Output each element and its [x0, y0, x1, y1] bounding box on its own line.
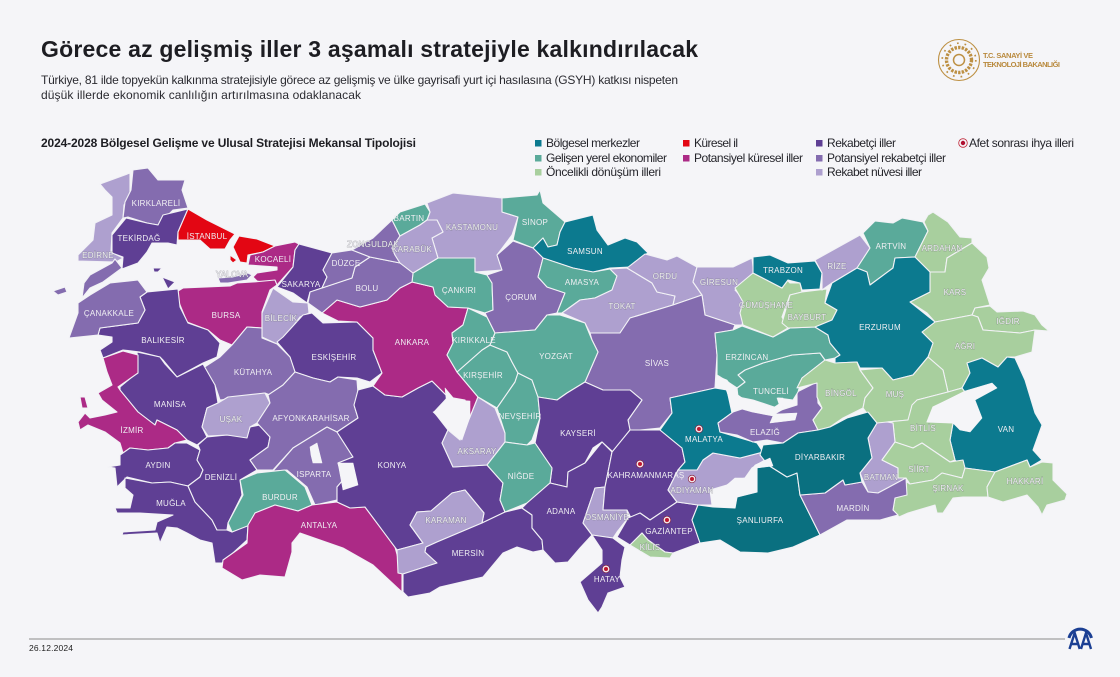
province: Ağrı [922, 315, 1035, 392]
province labels on light fills: KARABÜK [392, 245, 432, 254]
province labels on light fills: BİTLİS [910, 424, 936, 433]
province labels on light fills: AKSARAY [458, 447, 497, 456]
province labels on light fills: UŞAK [220, 415, 243, 424]
province: Malatya [660, 388, 763, 470]
province: Kayseri [535, 382, 642, 487]
province: Denizli [188, 425, 270, 530]
province: Yalova [218, 273, 252, 283]
province: Bolu [308, 257, 413, 313]
province: Gaziantep [617, 502, 700, 553]
province: Aksaray [442, 397, 505, 467]
province: Van [950, 357, 1042, 472]
province: Bilecik [262, 288, 309, 344]
province labels on dark fills: ÇANKIRI [442, 286, 476, 295]
province: Tokat [562, 268, 675, 333]
province: Hakkari [987, 460, 1067, 515]
province: İstanbul island [230, 255, 237, 263]
province: Edirne [78, 173, 130, 262]
province: Mersin [403, 508, 543, 597]
province: Karaman [397, 490, 484, 574]
province: Elazığ [718, 382, 822, 443]
province: Bursa [178, 280, 277, 345]
province labels on light fills: KARS [944, 288, 966, 297]
province labels on dark fills: ERZİNCAN [726, 353, 768, 362]
province labels on light fills [82, 223, 1043, 552]
province labels on light fills: BAYBURT [788, 313, 826, 322]
subtitle: Türkiye, 81 ilde topyekün kalkınma stratejisiyle görece az gelişmiş ve ülke gayrisafi yurt içi hasılasına (GSYH) katkısı nispeten [41, 73, 678, 87]
province labels on dark fills: KAHRAMANMARAŞ [607, 471, 685, 480]
province labels on light fills: EDİRNE [82, 251, 114, 260]
province: Batman [860, 422, 906, 493]
province labels on dark fills: BOLU [356, 284, 378, 293]
legend: Rekabetçi iller [827, 136, 896, 150]
province: Kocaeli [248, 242, 299, 285]
province labels on light fills: KASTAMONU [446, 223, 498, 232]
province labels on dark fills: KONYA [378, 461, 407, 470]
province labels on dark fills: ÇORUM [505, 293, 537, 302]
province labels on dark fills: HATAY [594, 575, 620, 584]
province labels on dark fills: TEKİRDAĞ [118, 234, 160, 243]
province labels on light fills: KİLİS [640, 543, 660, 552]
province: Bayburt [782, 289, 837, 328]
province labels on dark fills: ESKİŞEHİR [312, 353, 356, 362]
province labels on dark fills: ANTALYA [301, 521, 338, 530]
province labels on light fills: IĞDIR [996, 317, 1020, 326]
disaster markers [602, 425, 703, 573]
province labels on dark fills: İZMİR [120, 426, 144, 435]
province labels on dark fills: BURSA [212, 311, 241, 320]
province labels on light fills: OSMANİYE [585, 513, 629, 522]
province labels on dark fills: DİYARBAKIR [795, 453, 845, 462]
province: Kastamonu [427, 193, 518, 272]
province labels on dark fills: İSTANBUL [187, 232, 228, 241]
province labels on light fills: ORDU [653, 272, 677, 281]
province labels on dark fills: SİNOP [522, 218, 548, 227]
province labels on dark fills: MANİSA [154, 400, 186, 409]
province: Kütahya [203, 327, 295, 400]
subtitle: düşük illerde ekonomik canlılığın artırılmasına odaklanacak [41, 88, 362, 102]
province labels on light fills: ŞIRNAK [932, 484, 964, 493]
province labels on dark fills: DENİZLİ [205, 473, 237, 482]
legend: Potansiyel küresel iller [694, 151, 803, 165]
legend: Gelişen yerel ekonomiler [546, 151, 667, 165]
legend: Öncelikli dönüşüm illeri [546, 165, 661, 179]
province: Sivas [585, 295, 735, 431]
title: Görece az gelişmiş iller 3 aşamalı stratejiyle kalkındırılacak [41, 36, 698, 62]
province labels on light fills: RİZE [827, 262, 847, 271]
province: Ardahan [915, 212, 972, 272]
province: Artvin [857, 218, 928, 285]
province: Adana [522, 442, 612, 563]
province: Iğdır [972, 306, 1049, 333]
province labels on dark fills: KÜTAHYA [234, 368, 273, 377]
province labels on dark fills: VAN [998, 425, 1014, 434]
province: Burdur [228, 470, 312, 532]
province: Çorum [485, 241, 565, 333]
lakes [310, 378, 997, 508]
province labels on dark fills: MERSİN [452, 549, 484, 558]
province labels on dark fills: KAYSERİ [560, 429, 596, 438]
province labels on light fills: ARDAHAN [922, 244, 962, 253]
province labels on dark fills: ISPARTA [297, 470, 332, 479]
logo: AA [1069, 629, 1091, 649]
province labels on dark fills: NEVŞEHİR [499, 412, 541, 421]
province labels on dark fills: NİĞDE [508, 472, 534, 481]
province labels on dark fills: MUĞLA [156, 499, 186, 508]
legend: Potansiyel rekabetçi iller [827, 151, 946, 165]
province labels on dark fills: BALIKESİR [141, 336, 185, 345]
province: Kahramanmaraş [603, 430, 685, 520]
province labels on dark fills: YOZGAT [539, 352, 573, 361]
province labels on dark fills: TUNCELİ [753, 387, 789, 396]
province: Isparta [273, 427, 353, 505]
province labels on dark fills: KIRKLARELİ [132, 199, 180, 208]
province labels on light fills: GİRESUN [700, 278, 738, 287]
province: Şırnak [893, 468, 995, 517]
province labels on light fills: BATMAN [864, 473, 898, 482]
province labels on dark fills: TRABZON [763, 266, 803, 275]
legend: Afet sonrası ihya illeri [969, 136, 1074, 150]
province labels on light fills: KARAMAN [425, 516, 467, 525]
province labels on dark fills: AMASYA [565, 278, 600, 287]
province labels on light fills: HAKKARİ [1007, 477, 1043, 486]
province labels on dark fills: KOCAELİ [255, 255, 291, 264]
province labels on light fills: ZONGULDAK [347, 240, 399, 249]
province labels on light fills: BİNGÖL [825, 389, 857, 398]
province: Muş [860, 357, 948, 427]
province: Siirt [882, 442, 965, 484]
province: Tekirdağ [112, 209, 188, 269]
province labels on dark fills: DÜZCE [332, 259, 360, 268]
province: İzmir peninsula [80, 397, 88, 408]
province: Amasya [538, 258, 617, 313]
province: Gümüşhane [735, 273, 802, 337]
province: Afyonkarahisar [250, 372, 358, 470]
province: Antalya [222, 502, 402, 592]
map heading: 2024-2028 Bölgesel Gelişme ve Ulusal Stratejisi Mekansal Tipolojisi [41, 136, 416, 150]
legend: Küresel il [694, 136, 738, 150]
province: Eskişehir [277, 313, 382, 382]
subtitle [41, 73, 678, 102]
province: Tunceli [737, 353, 825, 408]
province: Aydın [108, 443, 203, 487]
province: Kars [910, 243, 990, 322]
province: Balıkesir islet [162, 277, 175, 289]
province: Sakarya [277, 244, 332, 303]
province labels on dark fills: SAMSUN [567, 247, 603, 256]
province: Balıkesir islands [153, 268, 162, 272]
province: Düzce [322, 250, 370, 288]
province labels on dark fills: ANKARA [395, 338, 430, 347]
province: Kırklareli [123, 168, 188, 225]
province: Çankırı [412, 258, 493, 313]
province labels on dark fills: ŞANLIURFA [737, 516, 784, 525]
province: Erzincan [715, 326, 840, 388]
province: Rize [815, 235, 870, 290]
province: Manisa [120, 352, 218, 445]
province: Giresun [693, 258, 754, 325]
province: Ankara [322, 282, 478, 417]
legend [535, 136, 1074, 179]
province labels on light fills: TOKAT [608, 302, 636, 311]
province labels on light fills: BİLECİK [265, 314, 298, 323]
province: İstanbul Europe [178, 209, 235, 249]
province: Çanakkale [69, 280, 147, 338]
province: Kilis [630, 533, 673, 558]
province labels on dark fills: MARDİN [836, 504, 870, 513]
province: Mardin [800, 478, 907, 535]
province labels on dark fills: MALATYA [685, 435, 723, 444]
footer rule [29, 638, 1065, 640]
province labels on dark fills: BURDUR [262, 493, 298, 502]
province labels on dark fills: SAKARYA [282, 280, 321, 289]
province: Samsun [533, 215, 648, 272]
province: Zonguldak [352, 220, 400, 263]
province: Osmaniye [583, 487, 628, 538]
province labels on dark fills: ARTVİN [876, 242, 906, 251]
province: Çanakkale Gökçeada [53, 287, 67, 295]
province: Bitlis [887, 388, 965, 462]
province labels on dark fills: BARTIN [394, 214, 424, 223]
province: Uşak [202, 393, 270, 438]
province labels on light fills: GÜMÜŞHANE [739, 301, 793, 310]
province: Hatay [580, 535, 625, 613]
province: Konya [337, 381, 505, 550]
logo: ministry: T.C. SANAYİ VE [983, 51, 1033, 60]
province: Şanlıurfa [692, 465, 820, 553]
province labels on light fills: AĞRI [955, 342, 975, 351]
province labels on dark fills: AYDIN [145, 461, 171, 470]
province: Yozgat [490, 315, 598, 400]
province labels on dark fills: ÇANAKKALE [84, 309, 134, 318]
province: Karabük [392, 220, 443, 273]
province labels on light fills: ADIYAMAN [670, 486, 714, 495]
footer date: 26.12.2024 [29, 643, 73, 653]
province labels on dark fills: AFYONKARAHİSAR [272, 414, 350, 423]
logo: ministry [938, 40, 1060, 80]
province: Erzurum [815, 257, 935, 380]
province labels on dark fills: ERZURUM [859, 323, 901, 332]
province labels on dark fills: KIRIKKALE [452, 336, 496, 345]
map of Turkey provinces [53, 168, 1067, 613]
province: Sinop [502, 190, 565, 248]
province: İstanbul Asia [233, 236, 275, 263]
legend: Bölgesel merkezler [546, 136, 640, 150]
province labels on dark fills: ADANA [547, 507, 576, 516]
province labels on dark fills: GAZİANTEP [645, 527, 693, 536]
province: Muğla [115, 478, 248, 563]
province: Kırıkkale [447, 308, 495, 372]
province: Adıyaman [668, 452, 768, 505]
province: Diyarbakır [760, 412, 877, 495]
province: Bingöl [797, 360, 873, 430]
province: Çanakkale Gallipoli [82, 259, 122, 298]
province labels on dark fills: KIRŞEHİR [463, 371, 503, 380]
province: Balıkesir [98, 289, 220, 377]
province: İzmir [78, 351, 187, 453]
legend: Rekabet nüvesi iller [827, 165, 922, 179]
province labels on light fills: YALOVA [216, 270, 249, 279]
province: Nevşehir [497, 373, 540, 445]
province labels on light fills: MUŞ [886, 390, 904, 399]
logo: ministry: TEKNOLOJİ BAKANLIĞI [983, 60, 1060, 69]
province labels on light fills: SİİRT [908, 465, 930, 474]
province: Ordu [627, 254, 702, 305]
province labels on dark fills: SİVAS [645, 359, 669, 368]
province: Kırşehir [457, 345, 518, 408]
province: Niğde [487, 442, 552, 512]
province labels on dark fills [84, 199, 1014, 584]
province: Trabzon [753, 255, 822, 290]
province labels on dark fills: ELAZIĞ [750, 428, 780, 437]
province: Bartın [392, 204, 430, 236]
